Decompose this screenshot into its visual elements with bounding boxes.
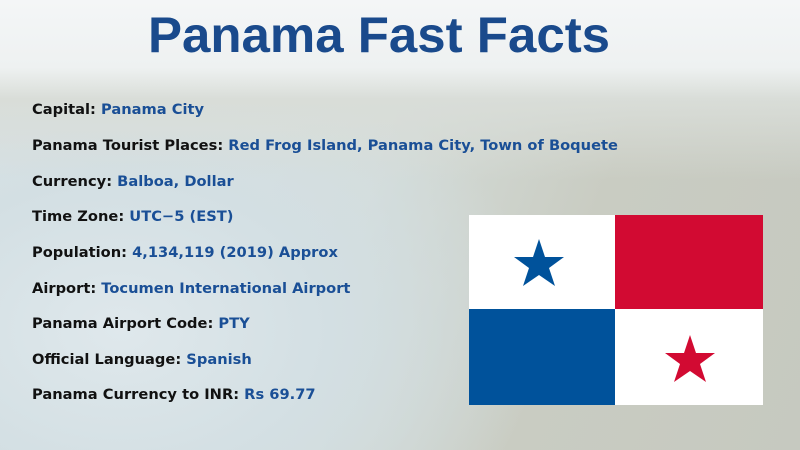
fact: population: Population: 4,134,119 (2019) Approx bbox=[32, 245, 338, 261]
fact: capital: Capital: Panama City bbox=[32, 102, 204, 118]
fact: airport: Airport: Tocumen International Airport bbox=[32, 281, 350, 297]
flag of Panama bbox=[469, 215, 763, 405]
fact: language: Official Language: Spanish bbox=[32, 352, 252, 368]
fact list bbox=[32, 102, 618, 403]
fact: tourist places: Panama Tourist Places: Red Frog Island, Panama City, Town of Boquete bbox=[32, 138, 618, 154]
fact: airport code: Panama Airport Code: PTY bbox=[32, 316, 250, 332]
title: Panama Fast Facts bbox=[148, 7, 610, 63]
fact: currency to INR: Panama Currency to INR: Rs 69.77 bbox=[32, 387, 316, 403]
fact: time zone: Time Zone: UTC−5 (EST) bbox=[32, 209, 233, 225]
fact: currency: Currency: Balboa, Dollar bbox=[32, 174, 234, 190]
